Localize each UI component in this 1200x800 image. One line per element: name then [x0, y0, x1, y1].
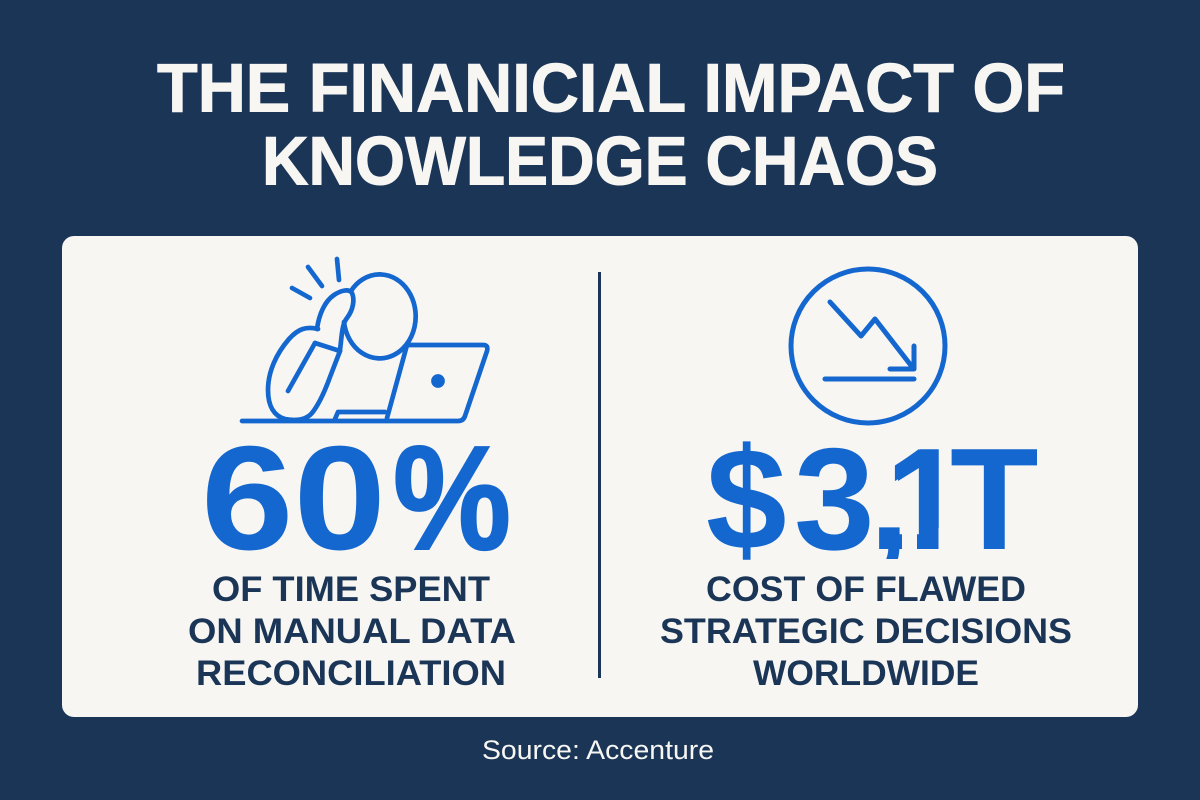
- source: Source: Accenture: [482, 735, 714, 765]
- text: 60% description: [188, 570, 516, 693]
- text: 60% description: ON MANUAL DATA: [188, 612, 516, 651]
- stat: 60%: %: [393, 416, 511, 581]
- divider: [598, 272, 601, 678]
- title: THE FINANICIAL IMPACT OF: [157, 50, 1065, 126]
- title: [157, 50, 1065, 200]
- text: 60% description: OF TIME SPENT: [212, 570, 490, 609]
- icon: stressed person at laptop: [242, 259, 487, 421]
- title: KNOWLEDGE CHAOS: [262, 122, 938, 200]
- stat: $3,1T: $3,1T: [706, 418, 1039, 580]
- panel: statistics card: [62, 236, 1138, 717]
- text: 60% description: RECONCILIATION: [196, 654, 506, 693]
- text: $3,1T description: [660, 570, 1072, 693]
- text: $3,1T description: WORLDWIDE: [753, 654, 979, 693]
- text: $3,1T description: STRATEGIC DECISIONS: [660, 612, 1072, 651]
- stat: 60%: 60: [201, 416, 386, 581]
- text: $3,1T description: COST OF FLAWED: [706, 570, 1026, 609]
- icon: declining chart in circle: [791, 269, 945, 423]
